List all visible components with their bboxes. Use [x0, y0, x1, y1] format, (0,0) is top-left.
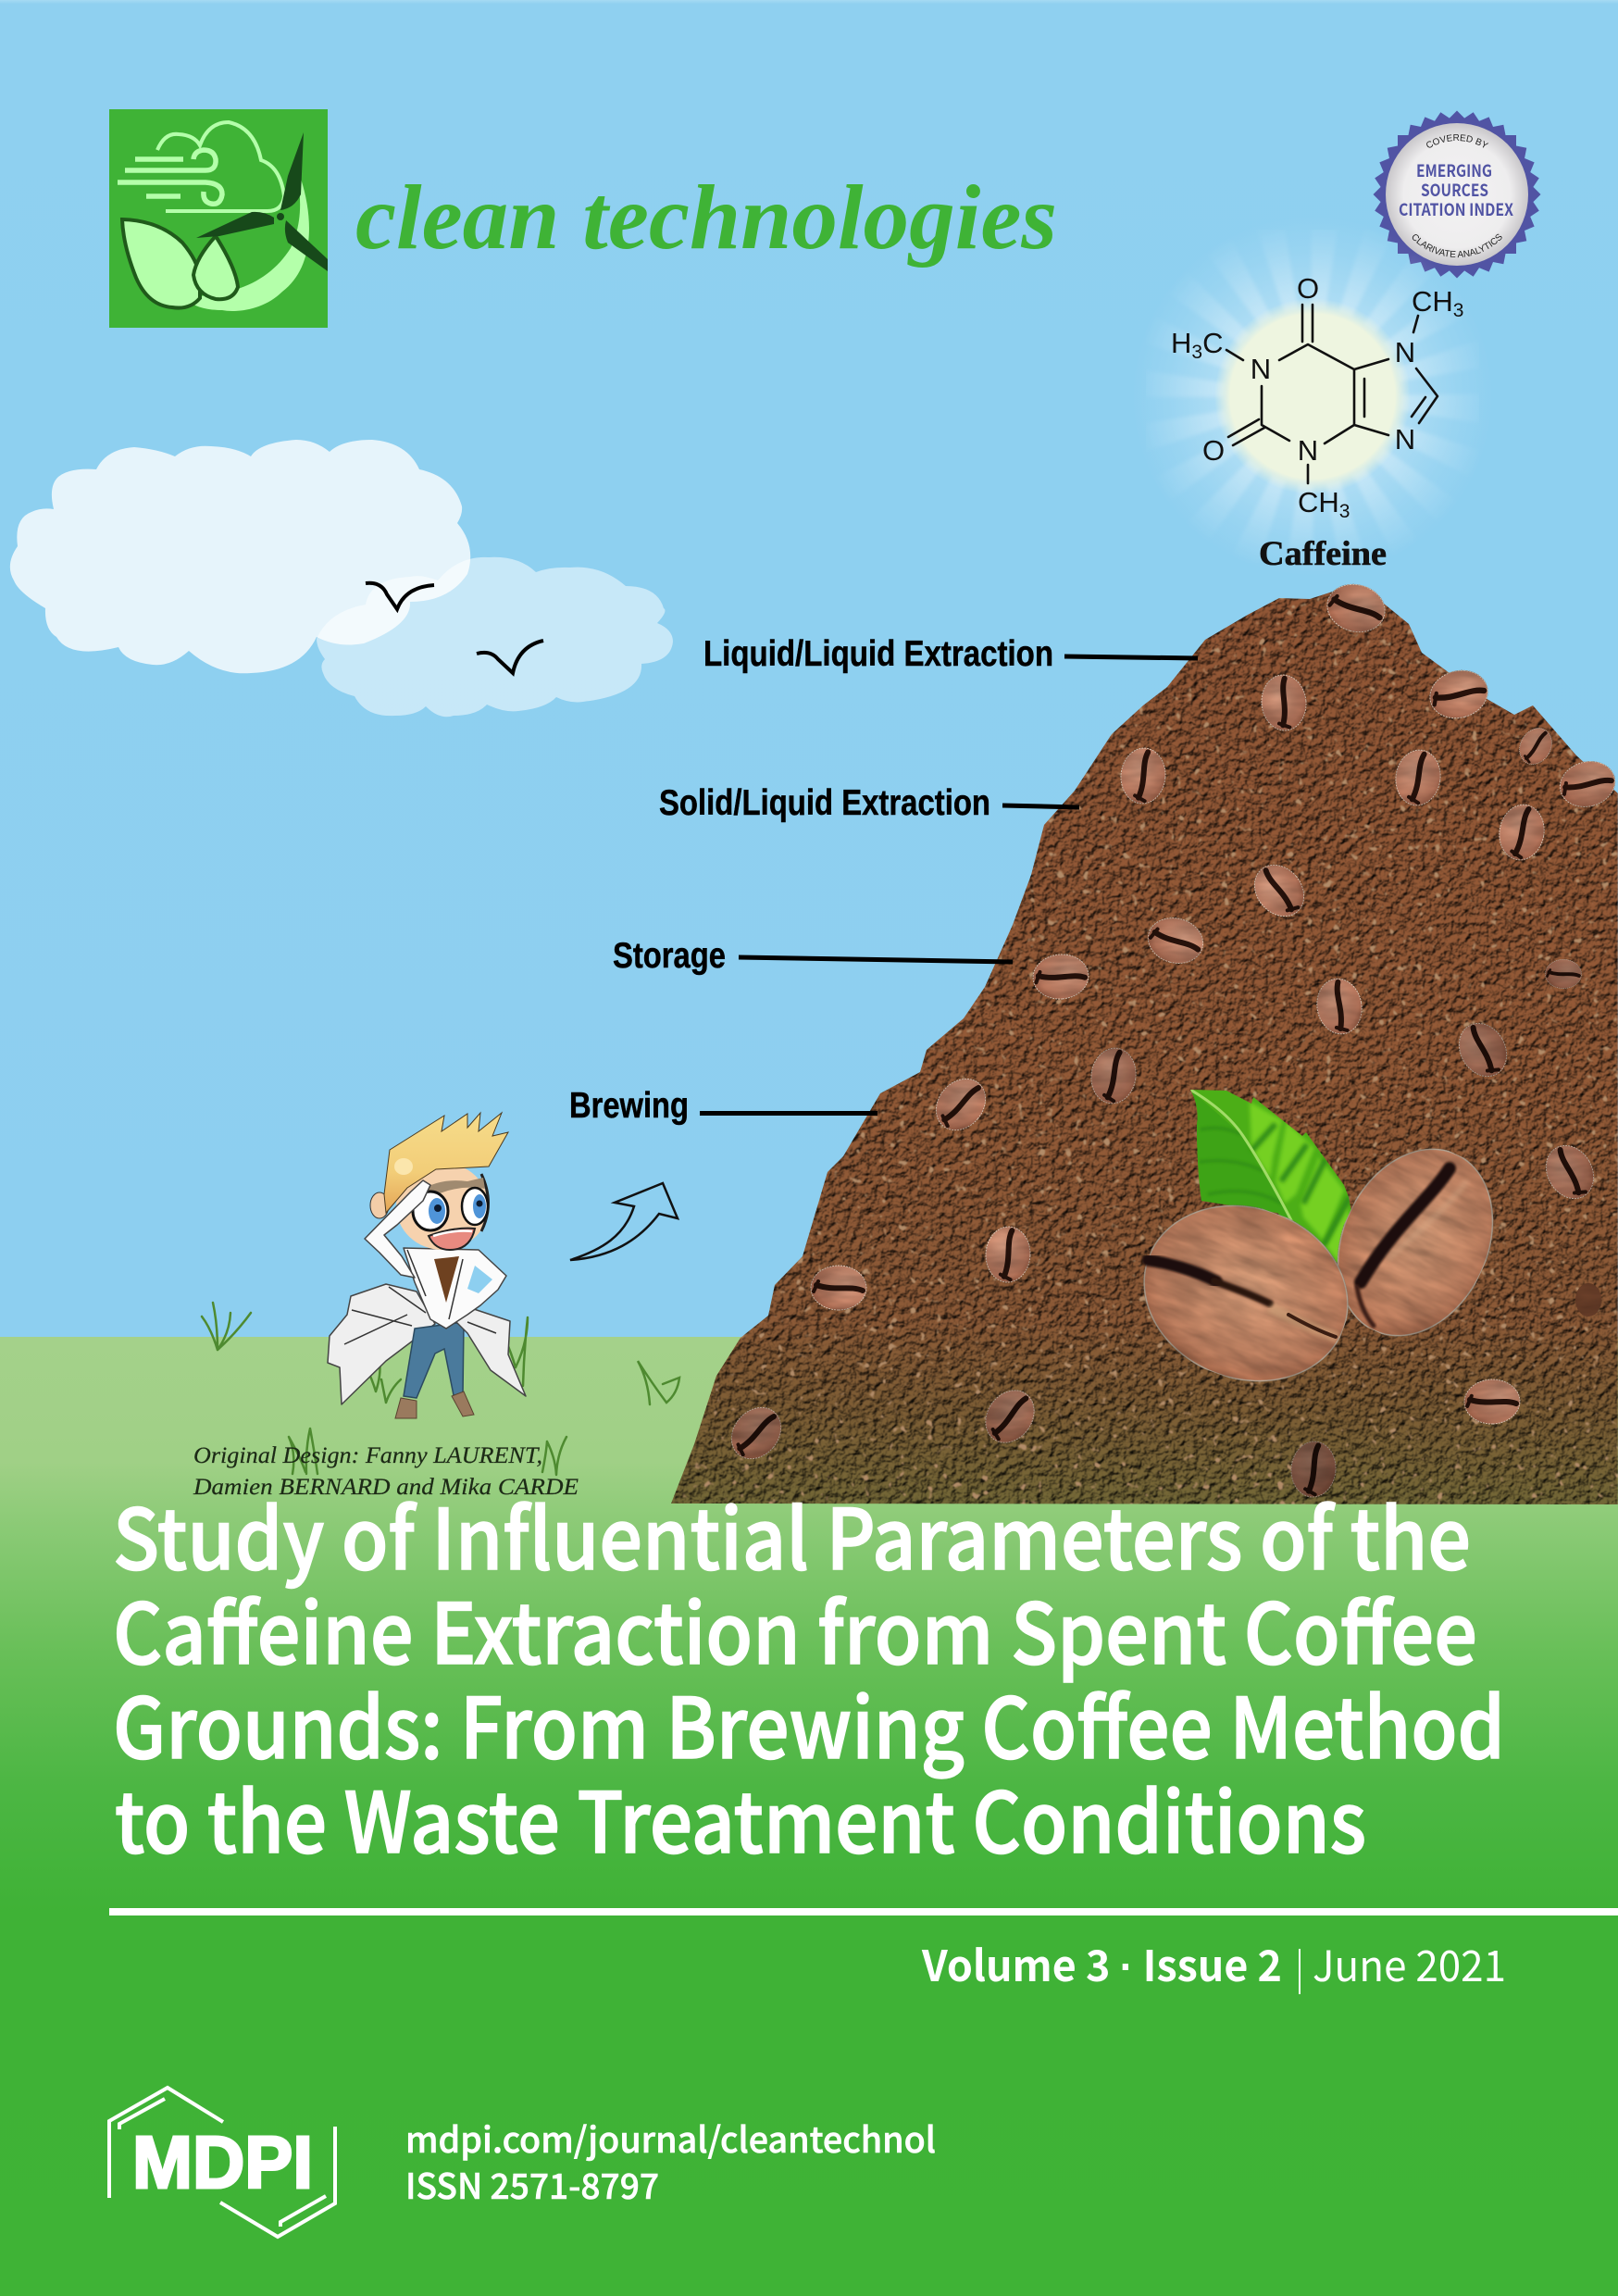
divider rule	[109, 1908, 1618, 1915]
left coat tail	[328, 1284, 435, 1404]
article title: to the Waste Treatment Conditions	[115, 1756, 1366, 1877]
cloud: small translucent	[317, 557, 673, 717]
badge: Emerging Sources Citation Index: EMERGING	[1416, 158, 1492, 182]
badge: Emerging Sources Citation Index	[1374, 111, 1540, 278]
label: Liquid/Liquid Extraction: Liquid/Liquid Extraction	[703, 634, 1053, 674]
label: Storage	[613, 936, 1013, 976]
ear	[370, 1192, 389, 1218]
article title: Caffeine Extraction from Spent Coffee	[113, 1567, 1477, 1688]
scattered coffee beans	[721, 579, 1618, 1499]
brown shirt	[434, 1256, 459, 1303]
arm gap showing sky	[467, 1266, 492, 1293]
caffeine label: Caffeine	[1259, 535, 1387, 573]
raised arm	[365, 1180, 430, 1278]
caffeine molecule: N	[1395, 336, 1415, 368]
caffeine molecule: N	[1298, 434, 1318, 467]
article title: Grounds: From Brewing Coffee Method	[113, 1662, 1505, 1782]
label: Solid/Liquid Extraction: Solid/Liquid Extraction	[659, 783, 990, 823]
volume and date: Volume 3 · Issue 2	[921, 1933, 1282, 1994]
journal url and ISSN: mdpi.com/journal/cleantechnol	[405, 2112, 936, 2163]
caffeine molecule: 3	[1191, 342, 1202, 363]
caffeine molecule: N	[1251, 353, 1271, 385]
brow shadow	[418, 1178, 485, 1200]
cloud: large white	[10, 440, 470, 673]
design credit: Original Design: Fanny LAURENT,	[193, 1443, 542, 1468]
badge: Emerging Sources Citation Index: COVERED BY	[1426, 134, 1488, 148]
article title	[113, 1473, 1505, 1877]
label: Brewing: Brewing	[569, 1086, 689, 1126]
coffee grounds mound	[648, 574, 1618, 1509]
arrow	[570, 1183, 678, 1260]
caffeine molecule: 3	[1339, 501, 1350, 522]
badge: Emerging Sources Citation Index: SOURCES	[1421, 178, 1488, 202]
MDPI logo: MDPI	[132, 2121, 313, 2203]
jeans	[404, 1322, 464, 1398]
grass tufts	[202, 1303, 679, 1475]
journal url and ISSN: ISSN 2571-8797	[405, 2158, 659, 2209]
coat lines	[344, 1250, 496, 1344]
large coffee bean: left	[1119, 1178, 1373, 1409]
journal name: clean technologies	[355, 166, 1057, 268]
logo: clean technologies emblem	[109, 109, 328, 328]
right coat tail	[454, 1308, 526, 1396]
label: Storage: Storage	[613, 936, 726, 976]
badge: Emerging Sources Citation Index: CITATION INDEX	[1399, 197, 1514, 221]
badge: Emerging Sources Citation Index: CLARIVATE ANALYTICS	[1413, 233, 1502, 257]
grass and green gradient band	[0, 1337, 1618, 2296]
green leaf	[1190, 1090, 1351, 1263]
caffeine glow	[1146, 230, 1479, 563]
shoes	[395, 1391, 474, 1418]
caffeine molecule: CH	[1298, 486, 1339, 518]
design credit: Damien BERNARD and Mika CARDE	[193, 1475, 579, 1500]
cartoon scientist	[328, 1113, 526, 1418]
caffeine molecule: O	[1297, 272, 1319, 305]
caffeine molecule	[1171, 272, 1463, 522]
volume and date	[921, 1933, 1506, 1994]
MDPI logo	[109, 2088, 335, 2237]
birds	[366, 583, 543, 673]
caffeine molecule: 3	[1453, 300, 1463, 321]
sky background	[0, 0, 1618, 1337]
design credit	[193, 1443, 579, 1500]
caffeine molecule: C	[1202, 327, 1223, 359]
mouth	[429, 1229, 475, 1250]
caffeine molecule: N	[1395, 423, 1415, 455]
eyes	[413, 1188, 488, 1230]
caffeine molecule: O	[1202, 434, 1225, 467]
article title: Study of Influential Parameters of the	[113, 1473, 1471, 1593]
caffeine molecule: H	[1171, 327, 1191, 359]
large coffee bean: right	[1309, 1124, 1522, 1361]
coat torso	[404, 1248, 506, 1329]
journal url and ISSN	[405, 2112, 936, 2209]
face	[396, 1163, 489, 1250]
volume and date: June 2021	[1313, 1933, 1506, 1994]
hair	[384, 1113, 508, 1213]
caffeine molecule: CH	[1412, 285, 1453, 318]
